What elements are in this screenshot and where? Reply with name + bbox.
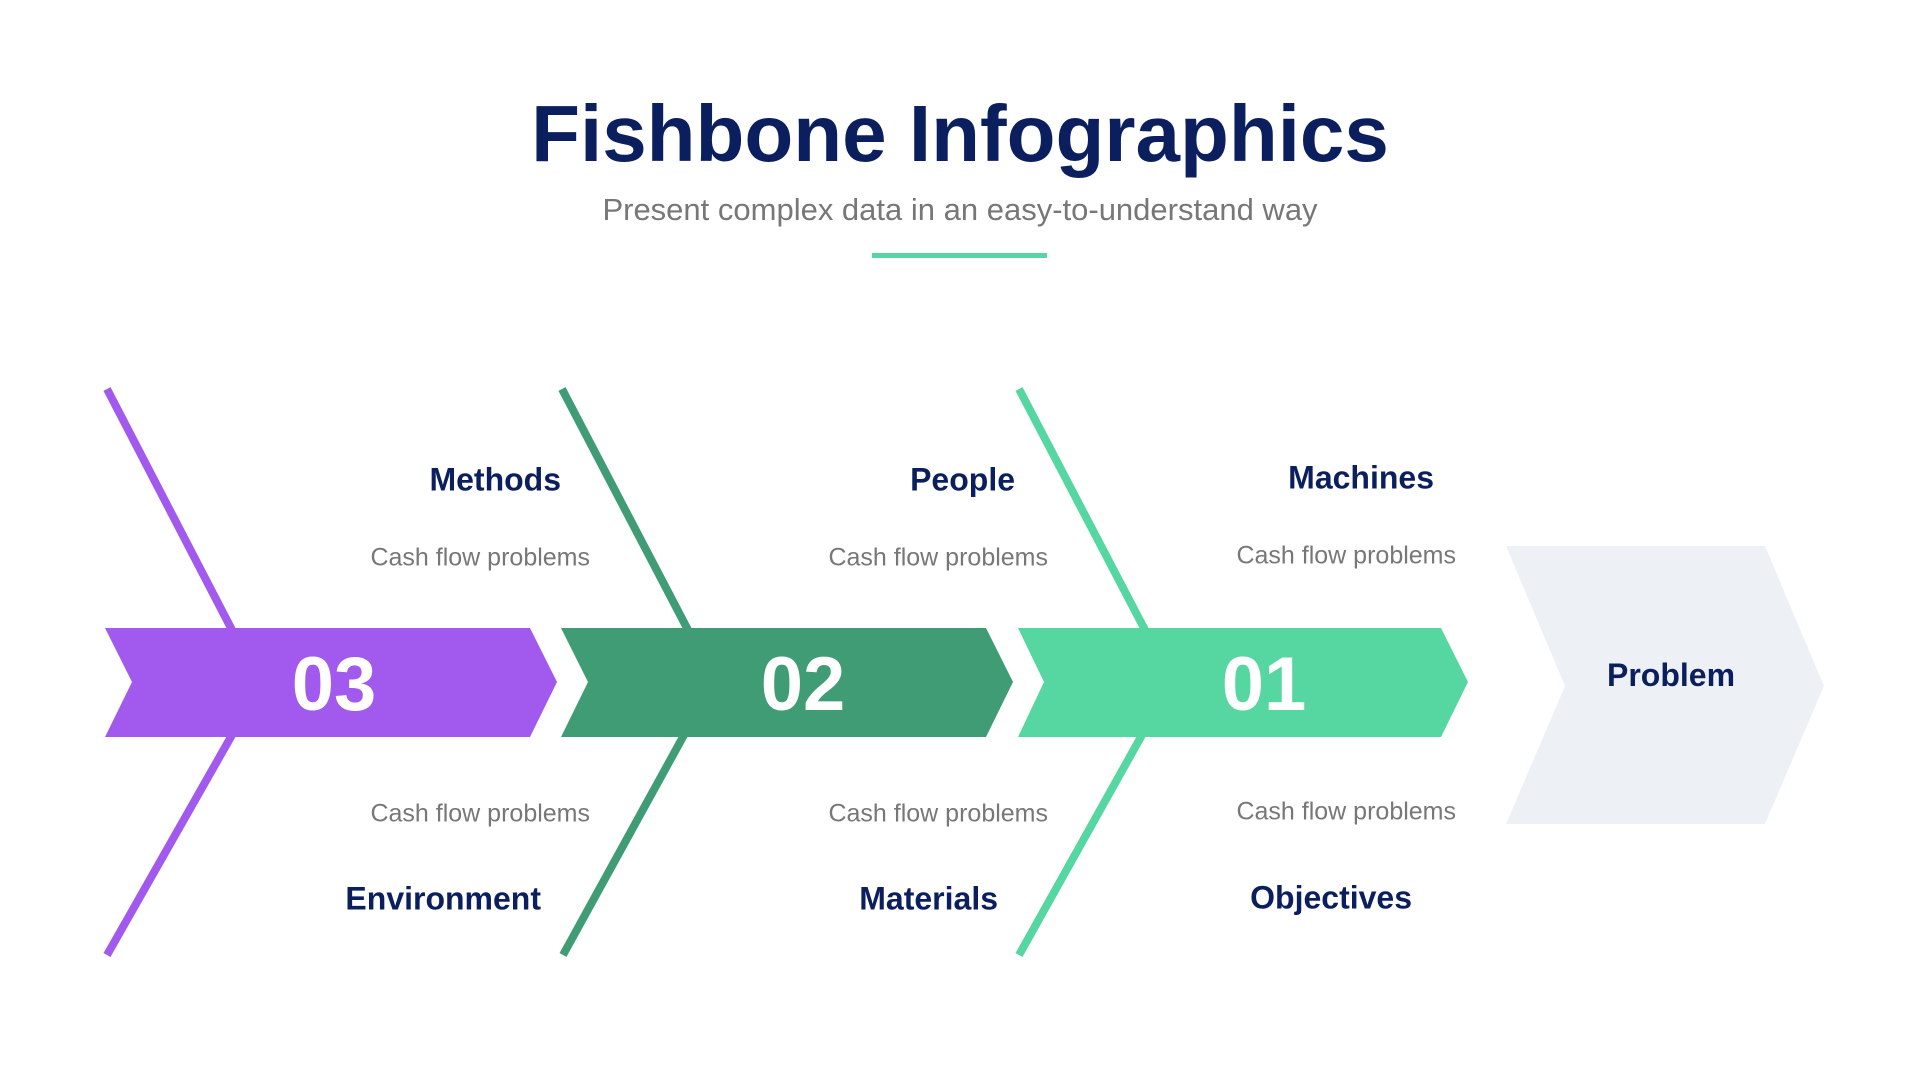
text: cash 02 upper: Cash flow problems — [828, 544, 1048, 572]
text: cash 03 upper: Cash flow problems — [370, 544, 590, 572]
bones: 01 — [1019, 389, 1145, 955]
text: cash 01 upper: Cash flow problems — [1236, 542, 1456, 570]
bones: 02 — [562, 389, 688, 955]
arrow 03: 03 — [292, 642, 376, 727]
arrow 02 — [561, 628, 1013, 737]
label: Machines: Machines — [1288, 460, 1434, 496]
label: Objectives: Objectives — [1250, 880, 1412, 916]
title: Fishbone Infographics — [531, 89, 1389, 178]
text: cash 02 lower: Cash flow problems — [828, 800, 1048, 828]
arrow 03 — [105, 628, 557, 737]
label: People: People — [910, 462, 1015, 498]
text: cash 01 lower: Cash flow problems — [1236, 798, 1456, 826]
text: cash 03 lower: Cash flow problems — [370, 800, 590, 828]
label: Environment: Environment — [345, 880, 541, 916]
bones: 03 — [107, 389, 232, 955]
arrow 02: 02 — [761, 642, 845, 727]
arrow 01: 01 — [1222, 642, 1306, 727]
accent line — [872, 253, 1047, 258]
problem head: Problem — [1607, 657, 1735, 693]
label: Materials: Materials — [859, 880, 998, 916]
problem head — [1506, 546, 1824, 824]
label: Methods: Methods — [429, 462, 561, 498]
arrow 01 — [1018, 628, 1468, 737]
subtitle: Present complex data in an easy-to-understand way — [602, 192, 1318, 227]
